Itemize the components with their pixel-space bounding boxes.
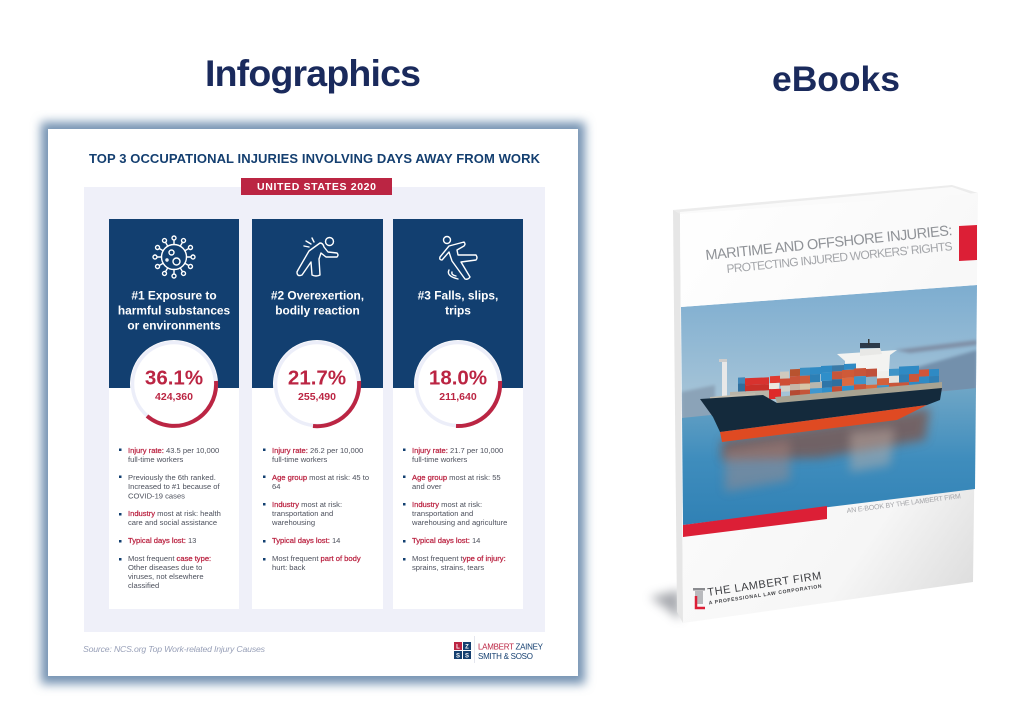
heading: eBooks: eBooks bbox=[772, 59, 900, 99]
bullet list: Industry most at risk: bbox=[272, 500, 342, 509]
deck rail bbox=[775, 382, 942, 403]
bullet list: Industry most at risk: bbox=[412, 500, 482, 509]
column heading bbox=[271, 288, 364, 318]
heading: Infographics: Infographics bbox=[205, 52, 421, 94]
bullet list: warehousing bbox=[271, 518, 315, 527]
cover bbox=[680, 193, 978, 623]
bullet list: warehousing and agriculture bbox=[411, 518, 507, 527]
hull bbox=[700, 388, 942, 432]
ebook title: MARITIME AND OFFSHORE INJURIES: bbox=[705, 223, 953, 264]
gauge: 21.7%: 21.7% bbox=[288, 366, 346, 390]
gauge: 18.0%: 211,640 bbox=[439, 391, 477, 403]
logo: The Lambert Firm bbox=[693, 570, 822, 608]
logo: Lambert Zainey Smith & Soso: L bbox=[456, 644, 460, 650]
bullet list: care and social assistance bbox=[128, 518, 217, 527]
column heading: or environments bbox=[127, 318, 221, 332]
column heading bbox=[418, 288, 498, 318]
bullet list: sprains, strains, tears bbox=[412, 563, 484, 572]
source note: Source: NCS.org Top Work-related Injury Causes bbox=[83, 644, 266, 654]
icon: person straining bbox=[297, 238, 338, 276]
bullet list: hurt: back bbox=[272, 563, 306, 572]
logo: Lambert Zainey Smith & Soso bbox=[454, 636, 544, 663]
bullet list: full-time workers bbox=[412, 455, 467, 464]
bullet list: Previously the 6th ranked. bbox=[128, 473, 216, 482]
red strip bbox=[683, 506, 827, 537]
bullet list bbox=[263, 446, 369, 572]
column 2: overexertion bbox=[252, 219, 383, 609]
book floor shadow bbox=[650, 590, 680, 620]
bullet list: and over bbox=[412, 482, 442, 491]
bullet list: Most frequent case type: bbox=[128, 554, 211, 563]
bullet list: Increased to #1 because of bbox=[128, 482, 221, 491]
logo: The Lambert Firm: A PROFESSIONAL LAW CORPORATION bbox=[708, 584, 822, 606]
logo: Lambert Zainey Smith & Soso: S bbox=[465, 654, 469, 660]
bullet list: full-time workers bbox=[272, 455, 327, 464]
cover photo: container ship bbox=[681, 285, 977, 530]
ebook cover mockup bbox=[650, 185, 978, 623]
bullet list: Injury rate: 26.2 per 10,000 bbox=[272, 446, 363, 455]
icon: person slipping bbox=[440, 236, 477, 279]
gauge: 36.1%: 36.1% bbox=[145, 366, 203, 390]
bullet list bbox=[403, 446, 507, 572]
panel: infographic card bbox=[41, 122, 585, 684]
bullet list: Typical days lost: 14 bbox=[272, 536, 340, 545]
ship superstructure bbox=[719, 339, 897, 397]
bullet list: Other diseases due to bbox=[128, 563, 202, 572]
logo: Lambert Zainey Smith & Soso: LAMBERT ZAINEY bbox=[478, 642, 544, 652]
gauge: 21.7%: 255,490 bbox=[298, 391, 336, 403]
banner: United States 2020 bbox=[241, 178, 392, 195]
spine bbox=[673, 210, 683, 623]
bullet list: Industry most at risk: health bbox=[128, 509, 221, 518]
bullet list: Typical days lost: 14 bbox=[412, 536, 480, 545]
column heading: #3 Falls, slips, bbox=[418, 288, 498, 302]
bullet list bbox=[119, 446, 221, 590]
column 3: falls bbox=[393, 219, 523, 609]
column heading bbox=[118, 288, 231, 332]
ebook title: PROTECTING INJURED WORKERS’ RIGHTS bbox=[726, 239, 953, 276]
column heading: #1 Exposure to bbox=[131, 288, 217, 302]
bullet list: viruses, not elsewhere bbox=[128, 572, 204, 581]
red cover tab bbox=[959, 225, 977, 261]
red waterline bbox=[720, 405, 927, 442]
gauge: 18.0%: 18.0% bbox=[429, 366, 487, 390]
byline: AN E-BOOK BY THE LAMBERT FIRM bbox=[846, 493, 961, 515]
bullet list: classified bbox=[128, 581, 159, 590]
banner: United States 2020: UNITED STATES 2020 bbox=[257, 181, 376, 193]
gauge: 36.1% bbox=[130, 340, 218, 428]
gauge: 18.0% bbox=[414, 340, 502, 428]
bullet list: Age group most at risk: 55 bbox=[412, 473, 501, 482]
bullet list: transportation and bbox=[412, 509, 473, 518]
icon: virus bbox=[153, 236, 195, 278]
bullet list: transportation and bbox=[272, 509, 333, 518]
column heading: trips bbox=[445, 304, 471, 318]
logo: Lambert Zainey Smith & Soso: SMITH & SOSO bbox=[478, 652, 533, 661]
reflection bbox=[722, 408, 930, 460]
light background panel bbox=[84, 187, 545, 632]
bullet list: Typical days lost: 13 bbox=[128, 536, 196, 545]
bullet list: full-time workers bbox=[128, 455, 183, 464]
distant haze bbox=[895, 340, 977, 353]
logo: The Lambert Firm: THE LAMBERT FIRM bbox=[707, 570, 822, 599]
column heading: #2 Overexertion, bbox=[271, 288, 364, 302]
card title: TOP 3 OCCUPATIONAL INJURIES INVOLVING DAYS AWAY FROM WORK bbox=[89, 151, 541, 166]
bullet list: Most frequent type of injury: bbox=[412, 554, 506, 563]
column heading: bodily reaction bbox=[275, 304, 360, 318]
bullet list: Age group most at risk: 45 to bbox=[272, 473, 369, 482]
gauge: 21.7% bbox=[273, 340, 361, 428]
bullet list: Most frequent part of body bbox=[272, 554, 361, 563]
column heading: harmful substances bbox=[118, 304, 231, 318]
logo: Lambert Zainey Smith & Soso: S bbox=[456, 654, 460, 660]
page block top bbox=[673, 185, 978, 215]
logo: Lambert Zainey Smith & Soso: Z bbox=[465, 644, 469, 650]
column 1: exposure bbox=[109, 219, 239, 609]
bullet list: COVID-19 cases bbox=[128, 492, 185, 500]
containers bbox=[730, 364, 939, 400]
bullet list: Injury rate: 21.7 per 10,000 bbox=[412, 446, 503, 455]
gauge: 36.1%: 424,360 bbox=[155, 391, 193, 403]
bullet list: Injury rate: 43.5 per 10,000 bbox=[128, 446, 219, 455]
bullet list: 64 bbox=[272, 482, 280, 491]
